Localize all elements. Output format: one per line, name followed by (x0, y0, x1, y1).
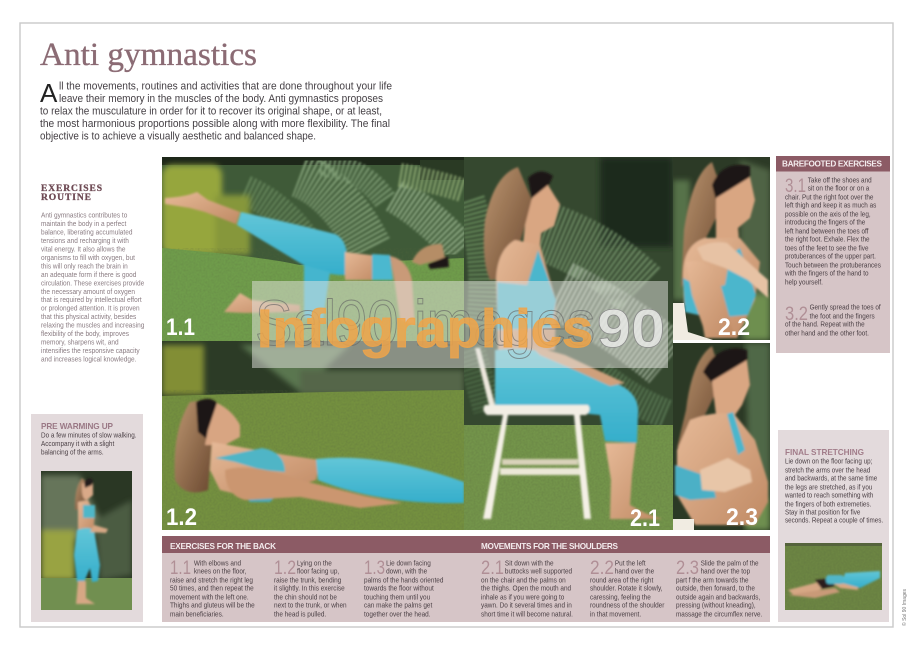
label 2.2: 2.2 (718, 314, 750, 341)
step 2.1: 2.1 (481, 558, 504, 579)
photo: lying stretch (785, 543, 882, 610)
step 1.2: it slightly. In this exercise (274, 585, 345, 593)
step 3.1: 3.1 (785, 176, 806, 197)
text: pre warming up: balancing of the arms. (41, 449, 104, 457)
step 3.1: Take off the shoes and (808, 177, 872, 185)
step 2.3: outside again and backwards, (676, 594, 760, 602)
step 2.3: hand over the top (701, 568, 750, 576)
step 3.1: left hand between the toes off (785, 228, 869, 236)
label 1.1: 1.1 (166, 314, 195, 341)
step 2.1: short time it will become natural. (481, 611, 573, 619)
step 3.2: other hand and the other foot. (785, 330, 869, 338)
step 1.1: Thighs and gluteus will be the (170, 602, 255, 610)
label 2.3: 2.3 (726, 504, 758, 531)
step 1.2: 1.2 (274, 558, 296, 579)
body text: exercises routine: relaxing the muscles and increasing (41, 322, 145, 330)
step 2.2: hand over the (615, 568, 654, 576)
photo 2.1: seated exercise (464, 157, 673, 530)
step 3.2: of the hand. Repeat with the (785, 321, 865, 329)
text: final stretching: seconds. Repeat a couple of times. (785, 517, 883, 525)
body text: exercises routine: memory, sharpens wit, and (41, 339, 119, 347)
step 3.1: help yourself. (785, 279, 823, 287)
step 1.2: the head is pulled. (274, 611, 326, 619)
step 3.2: 3.2 (785, 304, 808, 325)
heading: exercises routine: ROUTINE (41, 193, 91, 203)
intro line 2: leave their memory in the muscles of the body. Anti gymnastics proposes (59, 93, 383, 105)
body text: exercises routine: the necessary amount of oxygen (41, 289, 135, 296)
step 3.1: with the fingers of the hand to (784, 270, 869, 278)
body text: exercises routine: an adequate form if there is good (41, 272, 137, 279)
step 2.1: buttocks well supported (505, 568, 572, 576)
step 2.2: Put the left (615, 560, 646, 568)
step 1.3: together over the head. (364, 611, 431, 619)
step 3.2: the foot and the fingers (810, 313, 875, 321)
fern fronds (245, 165, 462, 250)
body text: exercises routine: tensions and recharging it with (41, 238, 129, 245)
text: final stretching: the fingers of both extremeties. (785, 501, 871, 509)
intro text (40, 78, 392, 142)
text: pre warming up: Do a few minutes of slow walking. (41, 432, 137, 440)
step 3.1: Touch between the protuberances (785, 262, 882, 270)
text: final stretching: Lie down on the floor facing up; (785, 458, 872, 466)
body text: exercises routine: that this physical activity, besides (41, 314, 137, 321)
label 2.1: 2.1 (630, 505, 660, 532)
step 3.1: sit on the floor or on a (808, 185, 870, 193)
step 1.1: main beneficiaries. (170, 611, 224, 619)
credit: © Sol 90 Images (901, 588, 908, 626)
step 2.2: round area of the right (590, 577, 653, 585)
heading: exercises for the back: EXERCISES FOR THE BACK (170, 542, 276, 551)
step 2.3: pressing (without kneading), (676, 602, 756, 610)
heading: exercises routine (41, 184, 102, 203)
step 3.1: the right foot. Exhale. Flex the (785, 236, 870, 244)
body text: exercises routine (41, 212, 145, 364)
watermark: 90 (597, 299, 665, 359)
step 1.1: 1.1 (170, 558, 191, 579)
chair back (475, 348, 495, 405)
step 2.1 (481, 558, 573, 619)
step 3.2: Gently spread the toes of (810, 304, 881, 312)
body text: exercises routine: or prolonged attention. It is proven (41, 306, 140, 313)
text: final stretching: Stay in that position for five (785, 509, 861, 517)
text: pre warming up: Accompany it with a slight (41, 441, 114, 448)
step 2.3 (676, 558, 762, 619)
step 2.3: 2.3 (676, 558, 699, 579)
step 1.1: 50 times, and then repeat the (170, 585, 254, 593)
step 1.3: can make the palms get (364, 602, 432, 610)
photo labels (166, 314, 758, 532)
body text: exercises routine: flexibility of the body, improves (41, 331, 130, 338)
step 3.1: toes of the feet to see the five (785, 245, 869, 253)
step 1.2: next to the trunk, or when (274, 602, 347, 610)
woman (484, 167, 532, 280)
heading: exercises routine: EXERCISES (41, 184, 102, 194)
title: Anti gymnastics (40, 37, 257, 73)
step 2.1: on the chair and the palms on (481, 577, 566, 585)
step 3.1: protuberances of the upper part. (785, 253, 876, 261)
photo 1.1: raised leg exercise (162, 157, 464, 341)
intro line 4: the most harmonious proportions possible along with more flexibility. The final (40, 118, 390, 130)
step 3.1: left thigh and keep it as much as (785, 202, 877, 210)
step 1.3: touching them until you (364, 594, 430, 602)
text: final stretching: and backwards, at the same time (785, 475, 877, 483)
text: final stretching: wanted to reach something with (784, 492, 874, 500)
body text: exercises routine: intensifies the responsive capacity (41, 348, 140, 355)
step 1.3: palms of the hands oriented (364, 577, 444, 585)
header bar (776, 156, 890, 172)
text: final stretching (784, 458, 883, 525)
step 1.3: 1.3 (364, 558, 385, 579)
body (165, 192, 240, 224)
step 2.1: inhale as if you were going to (481, 594, 565, 602)
step 2.1: the thighs. Open the mouth and (481, 585, 571, 593)
panel: pre warming up (31, 414, 143, 622)
step 1.1: raise and stretch the right leg (170, 577, 253, 585)
step 1.1: movement with the left one. (170, 594, 249, 602)
photo 2.2: hand on shoulder (673, 157, 770, 340)
header bar (162, 536, 770, 553)
step 3.1: possible on the axis of the leg, (785, 211, 871, 219)
watermark: Infographics (257, 299, 593, 359)
step 1.2: raise the trunk, bending (274, 577, 341, 585)
body text: exercises routine: this will only reach the brain in (41, 263, 128, 270)
text: final stretching: stretch the arms over the head (785, 467, 870, 475)
step 2.3: part f the arm towards the (676, 577, 749, 585)
step 3.2 (785, 304, 881, 338)
body text: exercises routine: balance, liberating accumulated (41, 229, 133, 237)
text: final stretching: the legs are stretched, as if you (785, 484, 873, 492)
label 1.2: 1.2 (166, 504, 197, 531)
photo 1.2: trunk raise exercise (162, 341, 464, 530)
body text: exercises routine: that is required by intellectual effort (41, 297, 142, 304)
step 3.1: introducing the fingers of the (785, 219, 866, 227)
step 1.3: down, with the (386, 568, 427, 576)
step 1.1: With elbows and (194, 560, 241, 568)
body text: exercises routine: organisms to fill with oxygen, but (41, 255, 135, 262)
body text: exercises routine: circulation. These exercises provide (41, 280, 144, 287)
body text: exercises routine: Anti gymnastics contributes to (41, 212, 128, 220)
step 2.3: Slide the palm of the (701, 560, 759, 568)
heading: barefooted exercises: BAREFOOTED EXERCISES (782, 160, 883, 168)
text: pre warming up (41, 432, 137, 457)
panel: final stretching (778, 430, 889, 622)
step 3.1: chair. Put the right foot over the (785, 194, 874, 202)
step 1.2: the chin should not be (274, 594, 337, 602)
step 1.2: Lying on the (297, 560, 332, 568)
step 1.2 (274, 558, 347, 619)
step 2.2: in that movement. (590, 611, 641, 619)
step 1.3: Lie down facing (386, 560, 431, 568)
body text: exercises routine: maintain the body in a perfect (41, 221, 126, 228)
step 1.1 (170, 558, 255, 619)
heading: pre warming up: PRE WARMING UP (41, 422, 114, 431)
chair (483, 405, 590, 415)
step 2.2 (590, 558, 665, 619)
step 2.2: 2.2 (590, 558, 614, 579)
intro line 3: to relax the musculature in order for it to recover its original shape, or at least, (40, 106, 382, 118)
watermark: Sal90 images (255, 287, 595, 359)
step 2.2: shoulder. Rotate it slowly, (590, 585, 663, 593)
step 1.1: knees on the floor, (194, 568, 247, 576)
heading: final stretching: FINAL STRETCHING (785, 448, 864, 457)
heading: movements for the shoulders: MOVEMENTS FOR THE SHOULDERS (481, 542, 619, 551)
intro line 1: ll the movements, routines and activities that are done throughout your life (59, 80, 392, 92)
photo 2.3: hand on arm (673, 343, 770, 530)
step 2.1: Sit down with the (505, 560, 554, 568)
step 2.3: massage the circumflex nerve. (676, 611, 762, 619)
step 2.2: roundness of the shoulder (590, 602, 665, 610)
step 1.3 (364, 558, 444, 619)
panel: barefooted exercises (776, 156, 890, 353)
step 3.1 (784, 176, 882, 287)
step 2.2: caressing, feeling the (590, 594, 651, 602)
step 2.1: yawn. Do it several times and in (481, 602, 572, 610)
panel: exercises routine (41, 184, 145, 364)
step 1.3: towards the floor without (364, 585, 434, 593)
body text: exercises routine: vital energy. It also allows the (41, 246, 126, 253)
body text: exercises routine: and increases logical knowledge. (41, 356, 137, 364)
step 2.3: outside, then forward, to the (676, 585, 755, 593)
step 1.2: floor facing up, (297, 568, 339, 576)
intro line 5: objective is to achieve a visually aesthetic and balanced shape. (40, 130, 316, 142)
photo: standing woman (41, 471, 132, 610)
drop cap: A (40, 78, 58, 108)
panel: bottom instructions (162, 536, 770, 622)
